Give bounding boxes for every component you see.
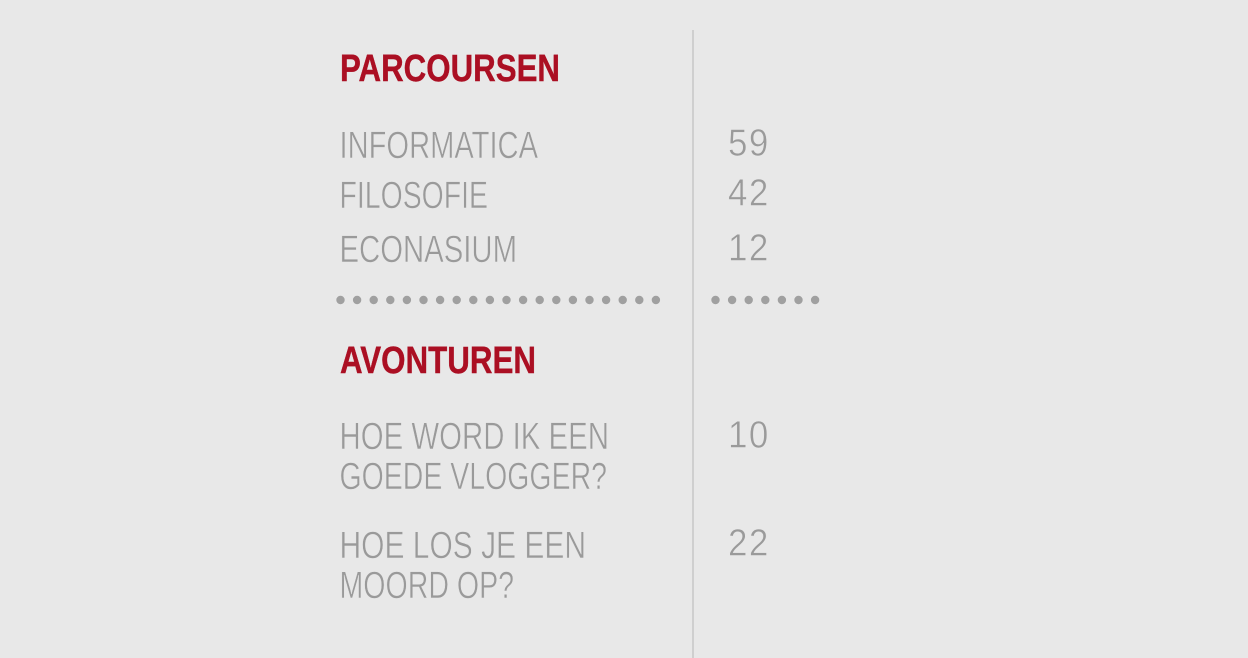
heading: avonturen: AVONTUREN <box>340 340 536 382</box>
section: parcoursen rows <box>340 121 770 271</box>
vertical column divider <box>692 30 694 658</box>
dotted separator: right column <box>716 296 816 304</box>
heading: parcoursen: PARCOURSEN <box>340 48 560 90</box>
row value: 22: 22 <box>728 521 770 564</box>
dotted separator: left column <box>340 296 656 304</box>
row value: 10: 10 <box>728 413 770 456</box>
row label: informatica: INFORMATICA <box>340 125 538 167</box>
row label: filosofie: FILOSOFIE <box>340 175 488 217</box>
row value: 59: 59 <box>728 121 770 164</box>
row label: hoe word ik een goede vlogger <box>340 416 609 498</box>
row value: 12: 12 <box>728 226 770 269</box>
row label: econasium: ECONASIUM <box>340 229 517 271</box>
row label: hoe los je een moord op: HOE LOS JE EEN <box>340 525 586 567</box>
section: avonturen rows <box>340 413 770 607</box>
row label: hoe word ik een goede vlogger: HOE WORD IK EEN <box>340 416 609 458</box>
row label: hoe los je een moord op: MOORD OP? <box>340 565 514 607</box>
row label: hoe word ik een goede vlogger: GOEDE VLOGGER? <box>340 456 607 498</box>
row label: hoe los je een moord op <box>340 525 586 607</box>
row value: 42: 42 <box>728 171 770 214</box>
